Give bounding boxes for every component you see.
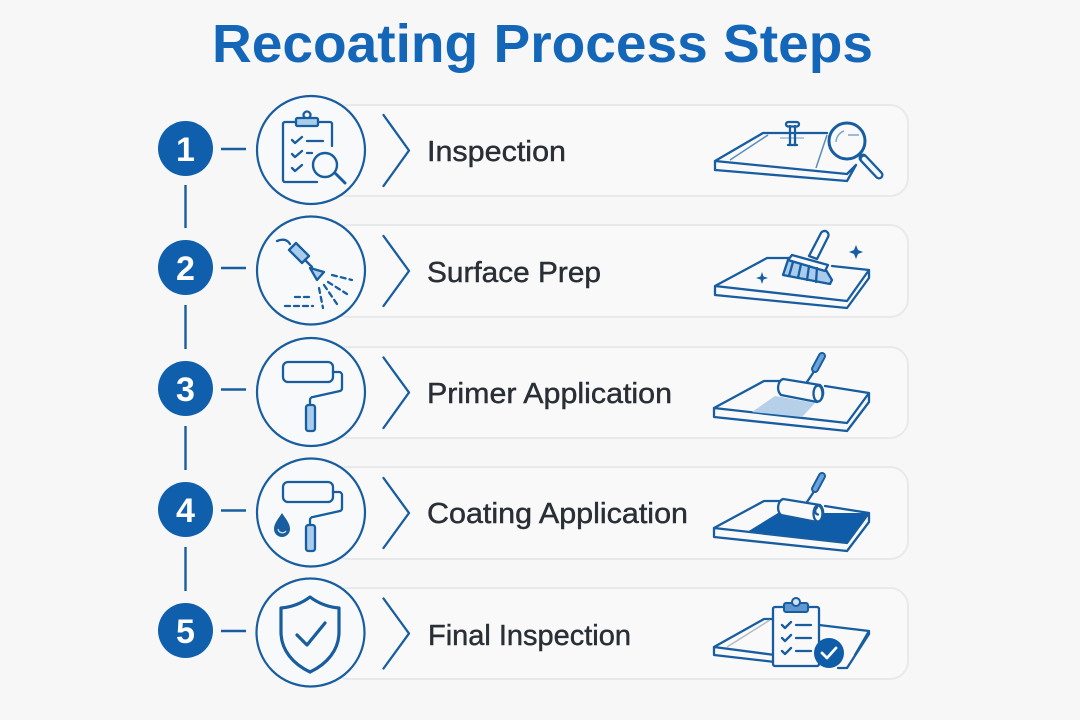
- icon: panel with pull tester and magnifier: [715, 122, 879, 181]
- label 1: Inspection: [427, 136, 566, 168]
- card 2: [330, 225, 908, 317]
- panel: step 5 final inspection: [158, 578, 908, 686]
- dash 2: [221, 267, 246, 269]
- icon: panel with brush and sparkles: [715, 231, 869, 308]
- badge 5: [158, 603, 213, 658]
- dash 1: [221, 148, 246, 150]
- panel: step 3 primer application: [158, 338, 908, 446]
- dash 4: [221, 509, 246, 512]
- card 1: [330, 105, 908, 196]
- icon: panel with coating roller: [714, 476, 869, 551]
- chevron 5: [384, 598, 409, 668]
- chevron 2: [384, 236, 409, 306]
- icon: paint roller: [257, 338, 365, 446]
- icon: clipboard with magnifier: [257, 96, 365, 204]
- chevron 3: [384, 358, 409, 428]
- label 2: Surface Prep: [427, 257, 601, 289]
- dash 5: [221, 630, 246, 632]
- icon: panel with checklist and check badge: [714, 598, 869, 668]
- badge 2: 2: [176, 250, 195, 288]
- chevron 1: [384, 115, 409, 186]
- title: Recoating Process Steps: [212, 14, 873, 74]
- icon: paint roller with drop: [257, 458, 365, 566]
- card 4: [330, 467, 908, 559]
- badge 5: 5: [176, 613, 195, 651]
- badge 3: [158, 361, 213, 416]
- label 3: Primer Application: [427, 378, 672, 410]
- chevron 4: [384, 478, 409, 548]
- icon: pressure sprayer: [257, 216, 365, 324]
- card 5: [330, 588, 908, 679]
- card 3: [330, 347, 908, 438]
- badge 3: 3: [176, 371, 195, 409]
- badge 2: [158, 240, 213, 295]
- label 5: Final Inspection: [428, 620, 631, 652]
- icon: panel with primer roller: [714, 356, 869, 431]
- dash 3: [221, 388, 246, 391]
- badge 1: 1: [176, 131, 195, 169]
- panel: step 4 coating application: [158, 458, 908, 566]
- icon: shield with check: [256, 578, 364, 686]
- label 4: Coating Application: [427, 498, 688, 530]
- panel: step 1 inspection: [158, 96, 908, 204]
- vertical connectors between step badges: [184, 185, 187, 591]
- badge 1: [158, 121, 213, 176]
- badge 4: [158, 482, 213, 537]
- panel: step 2 surface prep: [158, 216, 908, 324]
- badge 4: 4: [176, 492, 195, 530]
